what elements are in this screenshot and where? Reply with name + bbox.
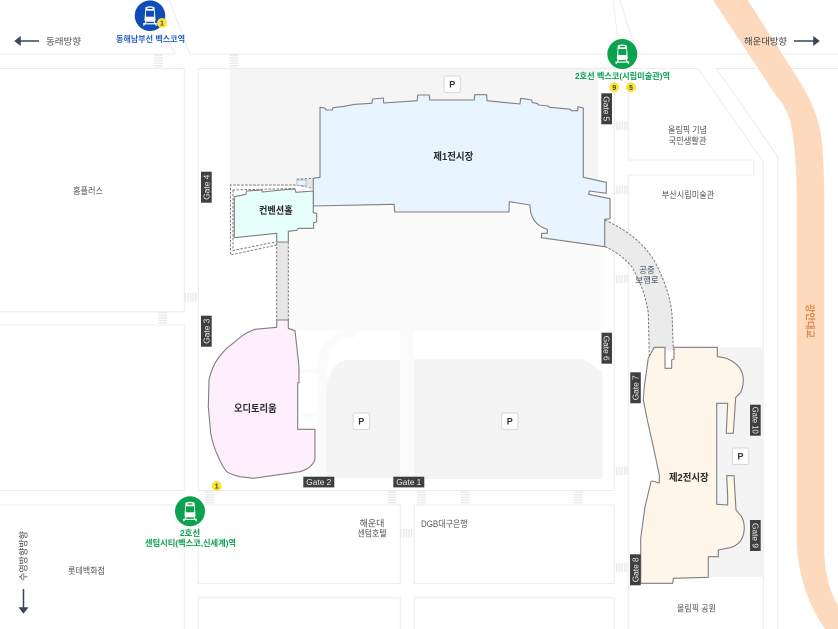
dgb bank: DGB대구은행	[421, 518, 468, 529]
label: hall 2: 제2전시장	[669, 471, 709, 484]
icon: green train	[175, 496, 205, 526]
label: walkway: 공중	[639, 265, 655, 275]
station: Line 2 Centum City	[145, 481, 236, 548]
place labels	[68, 124, 716, 614]
parking sign east	[732, 448, 749, 464]
exit badge 5: 5	[629, 85, 633, 92]
plaza ground	[288, 205, 604, 480]
parking sign east: P	[737, 452, 744, 462]
river band	[713, 0, 838, 629]
bridge label: 광안대교	[804, 304, 816, 338]
gate 2: Gate 2	[306, 477, 332, 487]
parking sign southwest	[353, 413, 370, 430]
label: 수영방향방향	[18, 531, 28, 581]
olympic memorial hall: 올림픽 기념	[668, 124, 707, 135]
arrow down	[20, 589, 27, 612]
building: hall 2	[641, 347, 744, 583]
gate 7: Gate 7	[630, 375, 640, 400]
parking sign southwest: P	[358, 416, 364, 426]
gate 3: Gate 3	[201, 318, 211, 344]
homeplus: 홈플러스	[73, 185, 103, 196]
station: Donghae line Bexco	[116, 0, 185, 44]
arrow right	[794, 38, 818, 44]
centum hotel: 센텀호텔	[358, 528, 386, 538]
parking lot east	[700, 347, 763, 577]
gate labels	[201, 93, 761, 585]
busan museum of art: 부산시립미술관	[662, 190, 714, 200]
station name: 2호선 벡스코(시립미술관)역	[575, 71, 670, 81]
gate 9: Gate 9	[750, 523, 760, 548]
station name: 동해남부선 벡스코역	[116, 34, 185, 44]
gate 1: Gate 1	[396, 477, 422, 487]
gate 8: Gate 8	[630, 557, 640, 582]
parking sign south: P	[507, 416, 513, 426]
exit badge 9: 9	[612, 85, 616, 92]
parking sign south	[502, 413, 518, 430]
label: auditorium: 오디토리움	[234, 402, 277, 415]
gate 10: Gate 10	[750, 407, 760, 434]
icon: blue train	[135, 0, 165, 31]
station name: 센텀시티(벡스코,신세계)역	[145, 538, 236, 548]
olympic park: 올림픽 공원	[677, 602, 716, 614]
parking sign north: P	[449, 80, 455, 90]
building: convention hall	[234, 189, 317, 242]
building: hall 1	[313, 95, 610, 247]
gate 5: Gate 5	[602, 96, 612, 122]
connector bridge	[277, 232, 288, 320]
label: 동래방향	[46, 36, 81, 46]
parking lot southwest	[327, 360, 400, 478]
station: Line 2 Bexco	[575, 39, 670, 92]
label: hall 1: 제1전시장	[433, 150, 473, 163]
centum hotel: 해운대	[360, 518, 384, 528]
olympic memorial hall: 국민생활관	[668, 135, 706, 146]
label: convention hall: 컨벤션홀	[259, 204, 293, 217]
covered walkway	[605, 220, 673, 356]
label: 해운대방향	[744, 36, 787, 46]
parking lot south	[414, 359, 602, 479]
parking sign north	[444, 76, 460, 92]
gate 6: Gate 6	[602, 336, 612, 361]
building: auditorium	[208, 320, 315, 478]
direction: Dongnae	[16, 36, 81, 46]
exit badge 1: 1	[160, 20, 164, 28]
direction: Suyeong	[18, 531, 28, 612]
crosswalks	[154, 54, 628, 572]
exit badge 1: 1	[215, 484, 219, 490]
lotte department store: 롯데백화점	[68, 565, 105, 576]
station name: 2호선	[180, 528, 200, 538]
parking signs	[353, 76, 749, 464]
direction: Haeundae	[744, 36, 818, 46]
gate 4: Gate 4	[201, 174, 211, 200]
arrow left	[16, 38, 39, 44]
convention hall dashed canopy	[230, 178, 313, 255]
parking lot north	[230, 69, 598, 186]
label: walkway: 보행로	[635, 275, 659, 285]
icon: green train	[607, 39, 637, 69]
